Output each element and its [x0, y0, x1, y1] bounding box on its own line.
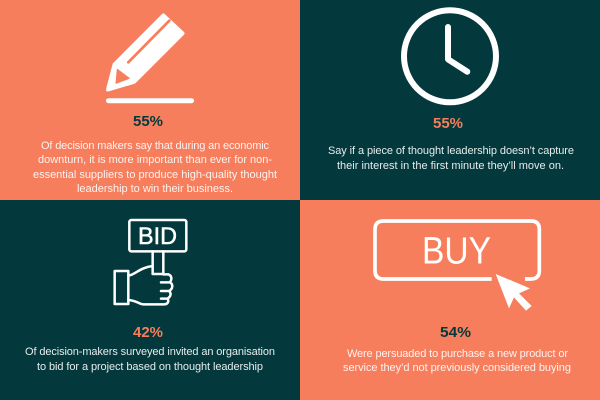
icon: clock — [404, 10, 496, 102]
text block: first minute: their interest in the first minute they’ll move on. — [337, 160, 564, 172]
statistic: 55%: 55% — [133, 114, 163, 130]
icon: buy button with cursor — [375, 221, 539, 311]
statistic: 54%: 54% — [440, 325, 471, 341]
text block: first minute — [328, 145, 574, 172]
panel: clock statistic — [300, 0, 600, 200]
text block: decision makers: essential suppliers to produce high-quality thought — [33, 169, 277, 181]
text block: persuaded to purchase: service they’d not previously considered buying — [343, 362, 571, 374]
panel: buy statistic — [300, 200, 600, 400]
button label: BUY — [422, 230, 491, 272]
text block: invited to bid: Of decision-makers surveyed invited an organisation — [25, 346, 275, 358]
text block: decision makers: downturn, it is more important than ever for non- — [38, 154, 272, 166]
icon: hand holding bid sign — [115, 220, 186, 304]
text block: decision makers: Of decision makers say that during an economic — [41, 140, 270, 152]
statistic: 55%: 55% — [433, 116, 463, 132]
sign label: BID — [138, 223, 177, 250]
text block: invited to bid: to bid for a project based on thought leadership — [37, 361, 263, 373]
text block: first minute: Say if a piece of thought leadership doesn’t capture — [328, 145, 574, 157]
statistic: 42%: 42% — [133, 325, 163, 341]
text block: persuaded to purchase — [343, 348, 571, 374]
text block: persuaded to purchase: Were persuaded to purchase a new product or — [347, 348, 568, 360]
panel: bid statistic — [0, 200, 300, 400]
text block: invited to bid — [25, 346, 275, 373]
icon: pencil — [108, 16, 192, 101]
text block: decision makers: leadership to win their business. — [77, 183, 233, 195]
panel: pencil statistic — [0, 0, 300, 200]
text block: decision makers — [33, 140, 277, 195]
